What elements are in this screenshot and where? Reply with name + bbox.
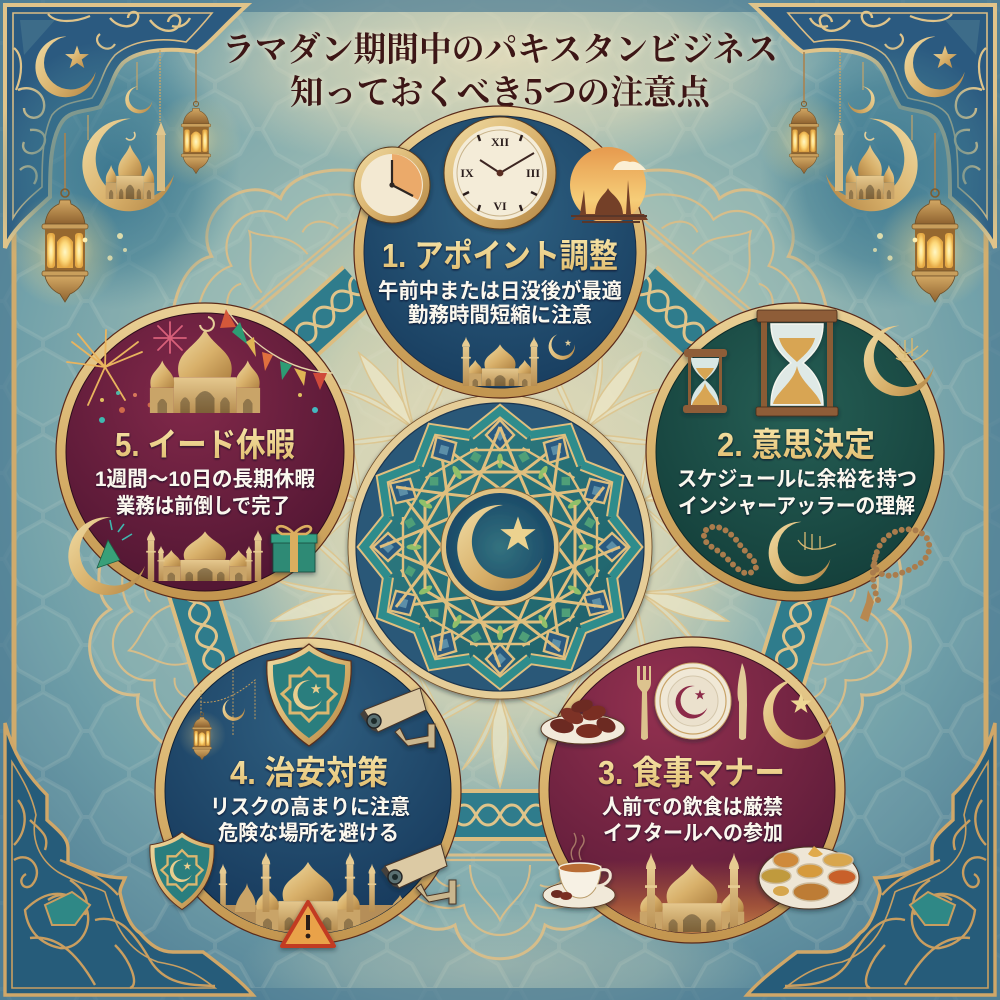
icon: large clock: III — [526, 166, 540, 180]
icon: crescent with calligraphy — [858, 320, 938, 402]
icon: crescent and star — [457, 505, 542, 591]
title line 2: 知っておくべき5つの注意点 — [290, 65, 712, 114]
icon: large clock: VI — [493, 199, 507, 213]
icon: small shield — [150, 832, 214, 910]
icon: bunting — [220, 307, 333, 390]
body text: インシャーアッラーの理解 — [678, 495, 915, 518]
heading: 3. 食事マナー — [598, 754, 785, 791]
body text: 危険な場所を避ける — [218, 822, 399, 845]
icon: fork — [637, 666, 651, 740]
body text — [95, 468, 315, 518]
title: ラマダン期間中のパキスタンビジネス — [222, 22, 778, 71]
icon: large clock: IX — [460, 166, 474, 180]
body text — [378, 279, 622, 327]
frame lines — [14, 230, 986, 770]
icon: prayer beads — [704, 527, 929, 600]
icon: gift box — [271, 526, 317, 572]
central medallion — [348, 395, 652, 699]
body text — [210, 796, 410, 845]
body text — [602, 796, 783, 845]
icon: bottom mosque — [146, 530, 263, 581]
icon: crescent with party hat — [65, 514, 147, 598]
icon: sunset mosque — [570, 147, 648, 223]
body text: リスクの高まりに注意 — [210, 796, 410, 819]
icon: tea cup — [543, 833, 615, 908]
icon: crescent and star — [758, 674, 836, 754]
body text — [677, 468, 917, 518]
panel 5: eid holiday — [56, 303, 354, 601]
heading: 2. 意思決定 — [717, 426, 875, 463]
icon: confetti — [99, 391, 318, 423]
body text: 業務は前倒しで完了 — [116, 495, 290, 518]
panel 1: appointments — [354, 106, 648, 398]
skyline — [218, 852, 402, 932]
hanging lanterns and crescent mosques, left — [0, 40, 242, 310]
heading: 4. 治安対策 — [230, 754, 388, 791]
panel 4: security — [150, 638, 461, 946]
icon: plate — [655, 663, 731, 739]
icon: main mosque — [150, 317, 260, 413]
icon: large hourglass — [756, 310, 838, 416]
icon: knife — [738, 663, 747, 740]
body text: 人前での飲食は厳禁 — [602, 796, 783, 819]
panel 2: decision making — [646, 303, 944, 622]
title — [222, 22, 778, 114]
icon: bottom crescent — [765, 518, 836, 588]
body text: 勤務時間短縮に注意 — [408, 304, 592, 327]
icon: fireworks — [67, 322, 186, 405]
icon: security camera lower — [381, 844, 456, 904]
icon: large clock — [444, 117, 556, 229]
icon: dates plate — [541, 697, 625, 744]
body text: スケジュールに余裕を持つ — [677, 468, 917, 491]
corner crescents and stars — [31, 32, 968, 102]
icon: large shield — [267, 644, 351, 746]
icon: tassel — [860, 590, 874, 622]
sunset mosque — [600, 853, 790, 935]
icon: security camera — [360, 688, 435, 748]
hanging lanterns and crescent mosques, right — [758, 40, 1000, 310]
icon: small hourglass — [683, 349, 727, 413]
icon: small clock — [354, 147, 430, 223]
heading: 1. アポイント調整 — [382, 237, 618, 274]
icon: hanging lantern — [178, 670, 255, 760]
body text: 午前中または日没後が最適 — [378, 279, 622, 303]
icon: mosque — [461, 329, 579, 386]
icon: warning triangle — [282, 902, 334, 946]
body text: 1週間〜10日の長期休暇 — [95, 468, 315, 491]
icon: large clock: XII — [491, 135, 509, 149]
body text: イフタールへの参加 — [603, 822, 783, 845]
background mandala — [46, 105, 954, 959]
panel 3: dining manners — [539, 637, 859, 943]
heading: 5. イード休暇 — [115, 426, 295, 463]
icon: food platter — [759, 846, 859, 909]
